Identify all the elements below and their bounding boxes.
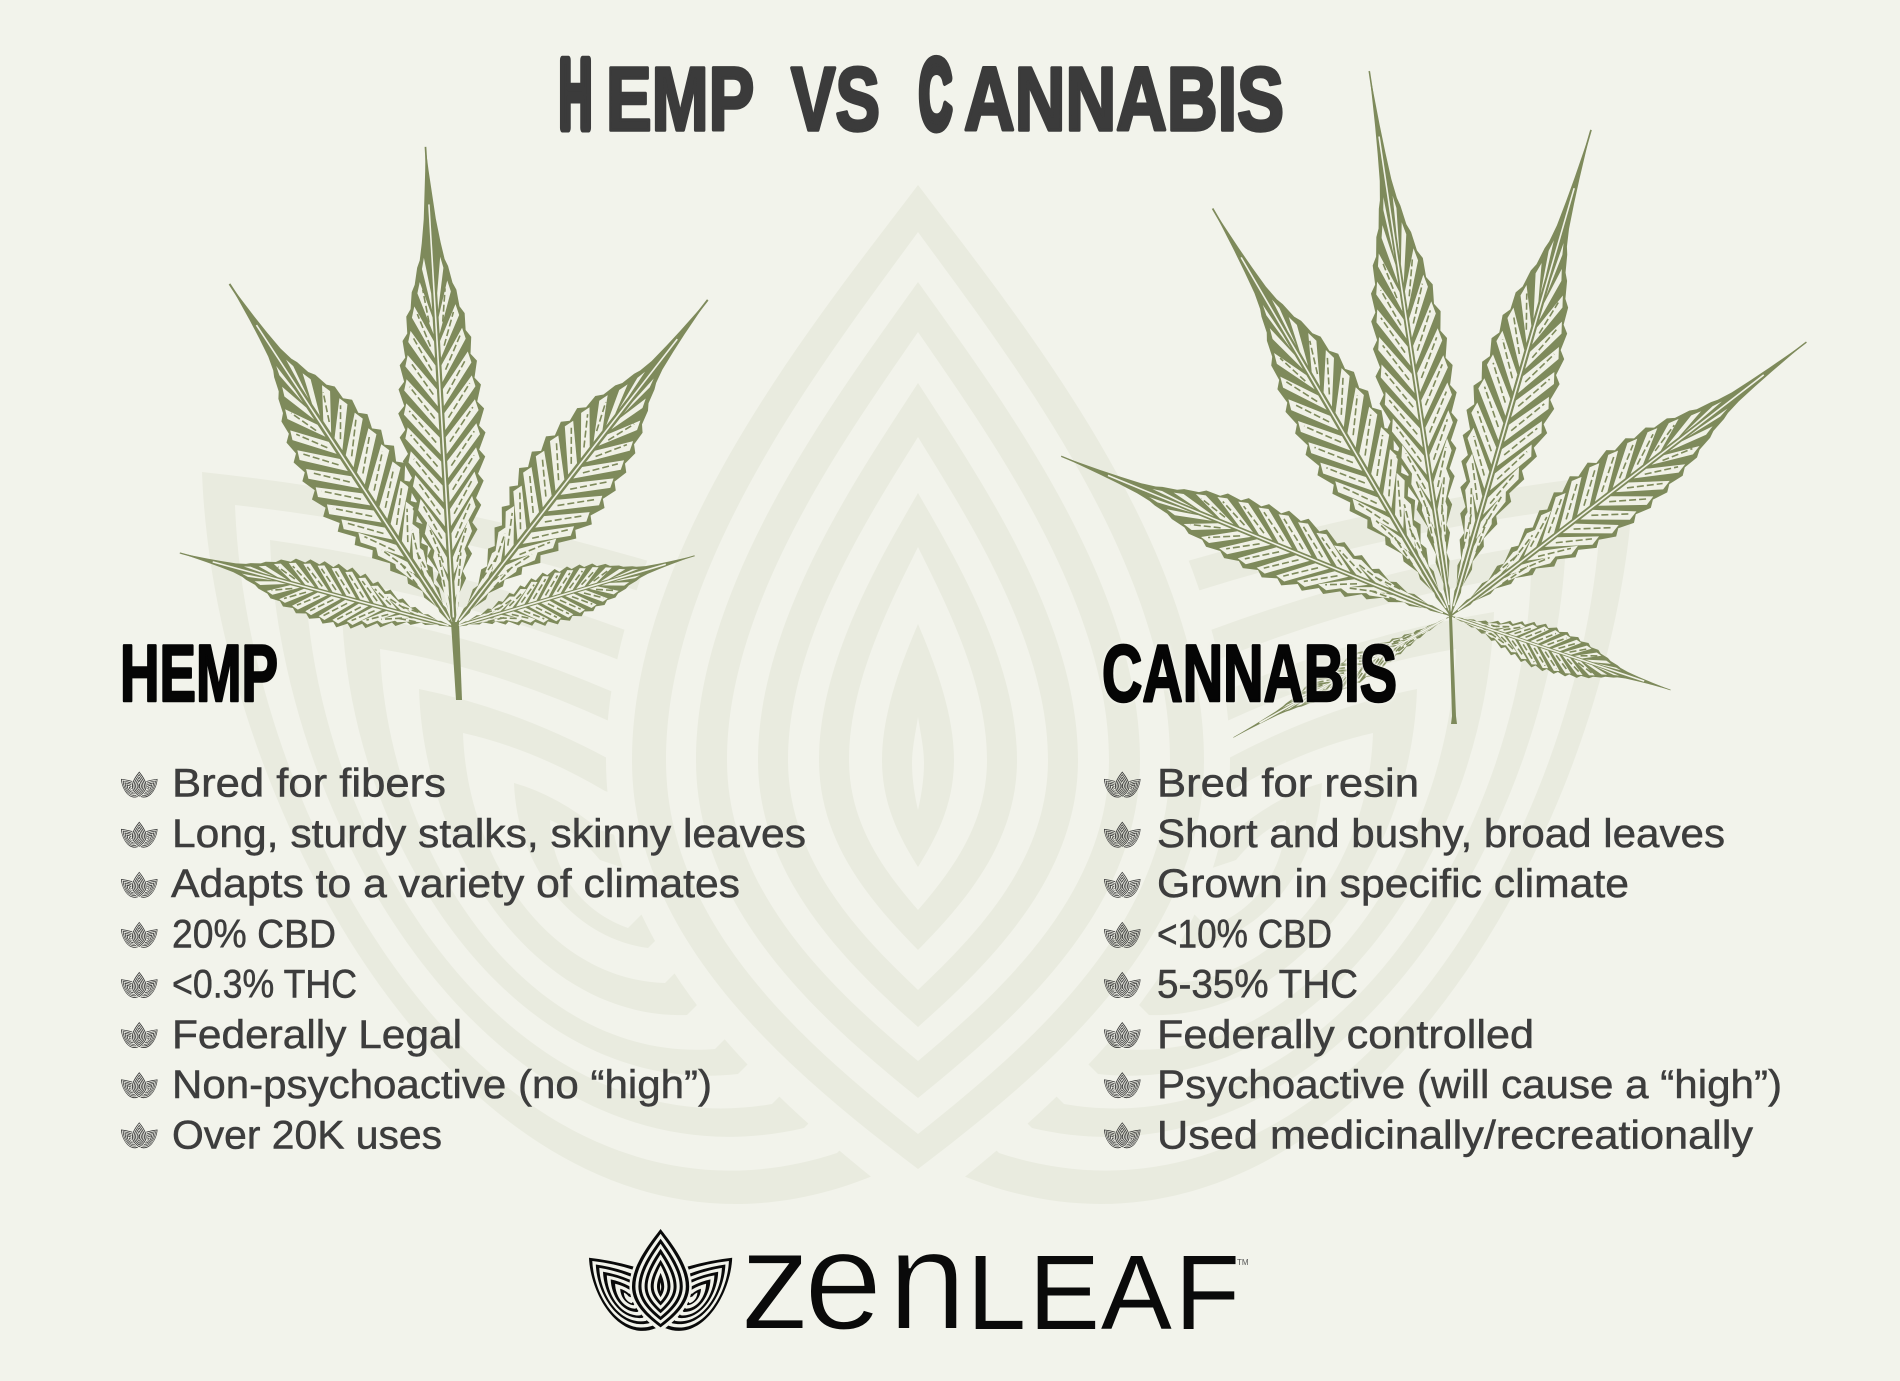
- hemp leaflet: center: [383, 144, 497, 630]
- hemp item 7: Non-psychoactive (no “high”): [172, 1063, 712, 1107]
- hemp item 8: Over 20K uses: [172, 1113, 442, 1157]
- title: EMP: [606, 50, 753, 150]
- watermark: lotus logo: [202, 185, 1634, 1204]
- heading: hemp: HEMP: [120, 629, 278, 719]
- hemp item 1: Bred for fibers: [172, 762, 446, 806]
- logo icon: lotus: [589, 1229, 732, 1331]
- cannabis item 8: Used medicinally/recreationally: [1157, 1113, 1753, 1157]
- list: hemp traits: [121, 762, 806, 1157]
- cannabis leaflet: lower left: [1227, 604, 1458, 750]
- hemp item 6: Federally Legal: [172, 1013, 462, 1057]
- cannabis item 6: Federally controlled: [1157, 1013, 1534, 1057]
- cannabis leaflet: far left: [1048, 423, 1464, 649]
- cannabis leaf illustration: [1048, 65, 1830, 750]
- cannabis item 4: <10% CBD: [1157, 912, 1332, 956]
- title: H: [559, 39, 592, 149]
- hemp leaf illustration: [172, 144, 744, 700]
- title: VS: [791, 50, 880, 150]
- title: C: [919, 39, 952, 149]
- cannabis leaflet: center: [1331, 65, 1489, 622]
- cannabis leaflet: far right: [1428, 312, 1830, 646]
- logo trademark: TM: [1237, 1258, 1249, 1267]
- hemp leaflet: upper left: [188, 257, 495, 654]
- hemp leaflet: far left: [172, 523, 462, 657]
- cannabis item 5: 5-35% THC: [1157, 962, 1358, 1006]
- logo wordmark: LEAF: LEAF: [967, 1234, 1240, 1352]
- hemp item 3: Adapts to a variety of climates: [171, 862, 740, 906]
- cannabis leaflet: upper left: [1175, 186, 1489, 638]
- logo wordmark: zen: zen: [740, 1201, 966, 1359]
- hemp item 4: 20% CBD: [172, 912, 336, 956]
- list: cannabis traits: [1104, 762, 1782, 1157]
- hemp item 5: <0.3% THC: [172, 962, 357, 1006]
- cannabis item 2: Short and bushy, broad leaves: [1157, 812, 1725, 856]
- hemp item 2: Long, sturdy stalks, skinny leaves: [172, 812, 806, 856]
- title: ANNABIS: [964, 50, 1284, 150]
- cannabis item 7: Psychoactive (will cause a “high”): [1157, 1063, 1782, 1107]
- hemp stem: [451, 622, 462, 700]
- hemp leaflet: upper right: [418, 272, 744, 655]
- hemp leaflet: far right: [446, 530, 702, 653]
- cannabis leaflet: lower right: [1443, 594, 1678, 712]
- logo: Zen Leaf: [589, 1201, 1249, 1359]
- cannabis item 3: Grown in specific climate: [1157, 862, 1629, 906]
- cannabis item 4: [1104, 912, 1332, 956]
- cannabis stem: [1449, 616, 1457, 724]
- heading: cannabis: CANNABIS: [1102, 629, 1397, 719]
- cannabis item 1: Bred for resin: [1157, 762, 1419, 806]
- cannabis leaflet: upper right: [1410, 118, 1631, 628]
